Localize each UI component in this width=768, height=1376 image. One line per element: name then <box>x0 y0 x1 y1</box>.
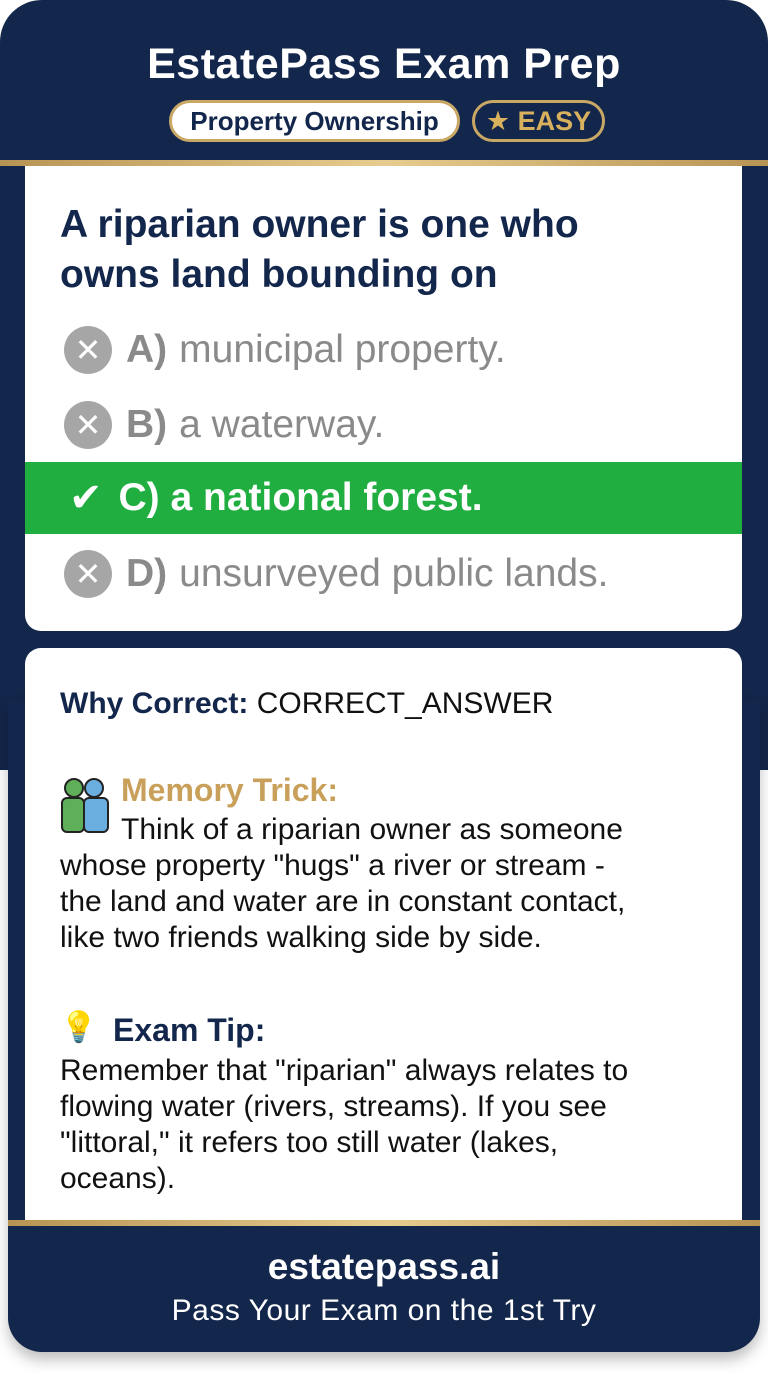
footer url: estatepass.ai <box>268 1246 500 1287</box>
option B <box>64 401 384 449</box>
option D: ✕ <box>75 556 101 592</box>
exam tip text <box>60 1054 628 1195</box>
exam tip text: "littoral," it refers too still water (lakes, <box>60 1126 558 1159</box>
option C correct: ✔ <box>69 476 103 520</box>
exam tip heading: Exam Tip: <box>113 1012 265 1048</box>
option A: ✕ <box>75 332 101 368</box>
badge: difficulty: ★ EASY <box>486 106 591 136</box>
option D: D) <box>126 552 167 595</box>
title: EstatePass Exam Prep <box>147 40 621 88</box>
option C correct: C) a national forest. <box>119 476 483 519</box>
badge: difficulty <box>472 100 605 142</box>
memory trick text: like two friends walking side by side. <box>60 921 542 954</box>
option C correct <box>25 462 742 534</box>
exam tip text: flowing water (rivers, streams). If you see <box>60 1090 607 1123</box>
footer tagline: Pass Your Exam on the 1st Try <box>172 1294 596 1327</box>
icon: hugging friends <box>61 778 109 833</box>
header <box>147 40 621 142</box>
option B: a waterway. <box>179 403 384 446</box>
badge: topic <box>169 100 460 142</box>
panel: question <box>25 166 742 631</box>
option D: unsurveyed public lands. <box>179 552 608 595</box>
option A: municipal property. <box>179 328 506 371</box>
gold divider top <box>0 160 768 166</box>
option B: B) <box>126 403 167 446</box>
option B: ✕ <box>75 407 101 443</box>
memory trick text <box>60 813 625 954</box>
top navy background <box>0 0 768 770</box>
icon: lightbulb: 💡 <box>60 1011 97 1044</box>
panel: explanation <box>25 648 742 1222</box>
memory trick text: Think of a riparian owner as someone <box>121 813 623 846</box>
question text: A riparian owner is one who owns land bounding on <box>60 203 579 296</box>
exam tip text: Remember that "riparian" always relates to <box>60 1054 628 1087</box>
option A: A) <box>126 328 167 371</box>
why correct: Why Correct: CORRECT_ANSWER <box>60 687 553 720</box>
memory trick heading: Memory Trick: <box>121 772 338 808</box>
memory trick text: the land and water are in constant contact, <box>60 885 625 918</box>
gold divider bottom <box>8 1220 760 1226</box>
side navy frame <box>8 700 760 1352</box>
footer <box>172 1246 596 1327</box>
exam tip text: oceans). <box>60 1162 175 1195</box>
memory trick text: whose property "hugs" a river or stream - <box>60 849 605 882</box>
option A <box>64 326 506 374</box>
badge: topic: Property Ownership <box>190 106 439 136</box>
